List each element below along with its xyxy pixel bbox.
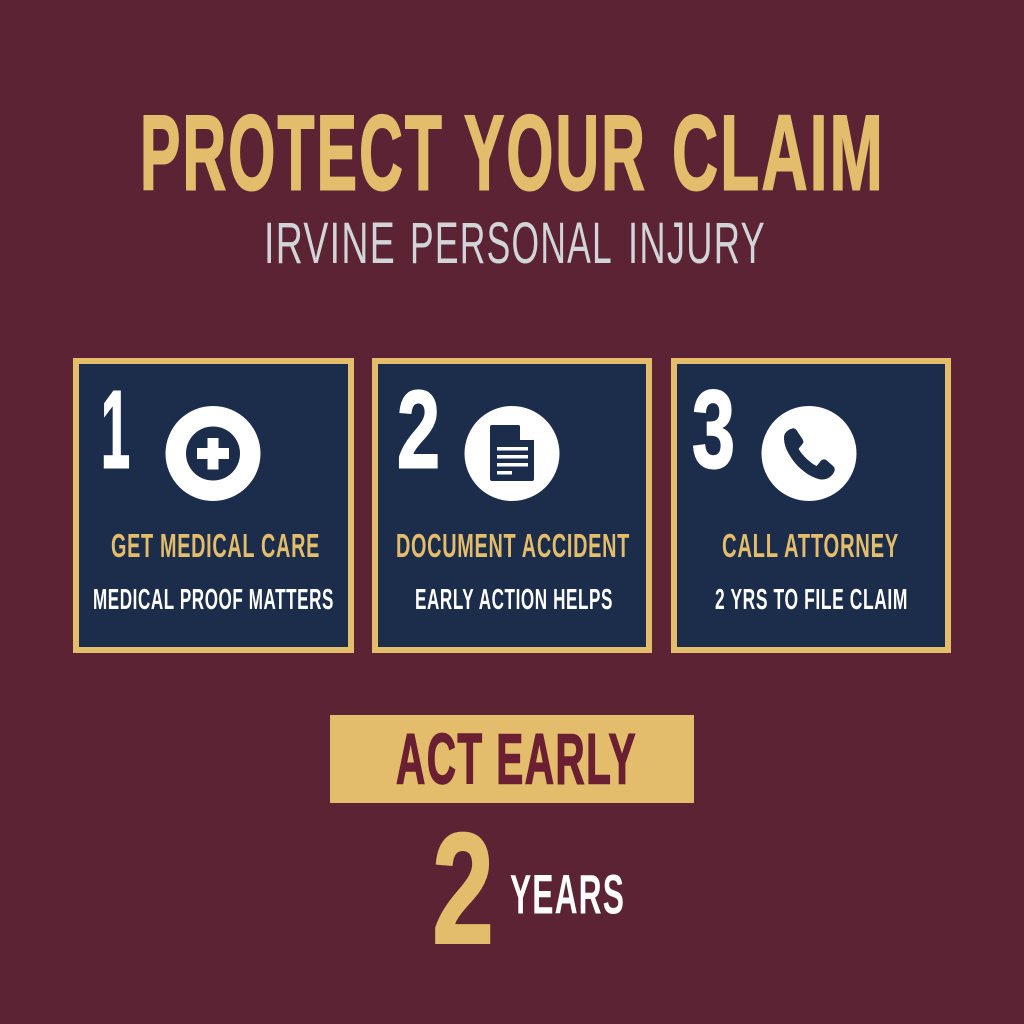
step heading: GET MEDICAL CARE [111, 528, 320, 565]
panel: step 1 get medical care [76, 361, 351, 650]
step detail: MEDICAL PROOF MATTERS [93, 584, 334, 616]
subtitle [264, 211, 766, 276]
panel: step 2 document accident [375, 361, 649, 650]
icon: document [464, 406, 560, 501]
banner: act early [330, 715, 694, 803]
years label: YEARS [510, 862, 625, 926]
step detail: EARLY ACTION HELPS [415, 584, 613, 616]
title: YOUR [464, 92, 647, 212]
subtitle: PERSONAL [410, 211, 613, 276]
icon: medical cross [166, 406, 260, 501]
banner: act early: ACT EARLY [396, 720, 637, 800]
subtitle: IRVINE [264, 211, 396, 276]
title: PROTECT [140, 92, 444, 212]
icon: phone [762, 406, 856, 501]
step heading: DOCUMENT ACCIDENT [396, 528, 630, 565]
step heading: CALL ATTORNEY [722, 528, 899, 565]
panel: step 3 call attorney [674, 361, 948, 650]
step number 2: 2 [397, 368, 440, 492]
panel: step 1 get medical care: 1 [101, 368, 130, 492]
big number 2: 2 [432, 801, 494, 977]
step number 3: 3 [692, 368, 735, 492]
subtitle: INJURY [628, 211, 766, 276]
title: CLAIM [672, 92, 885, 212]
